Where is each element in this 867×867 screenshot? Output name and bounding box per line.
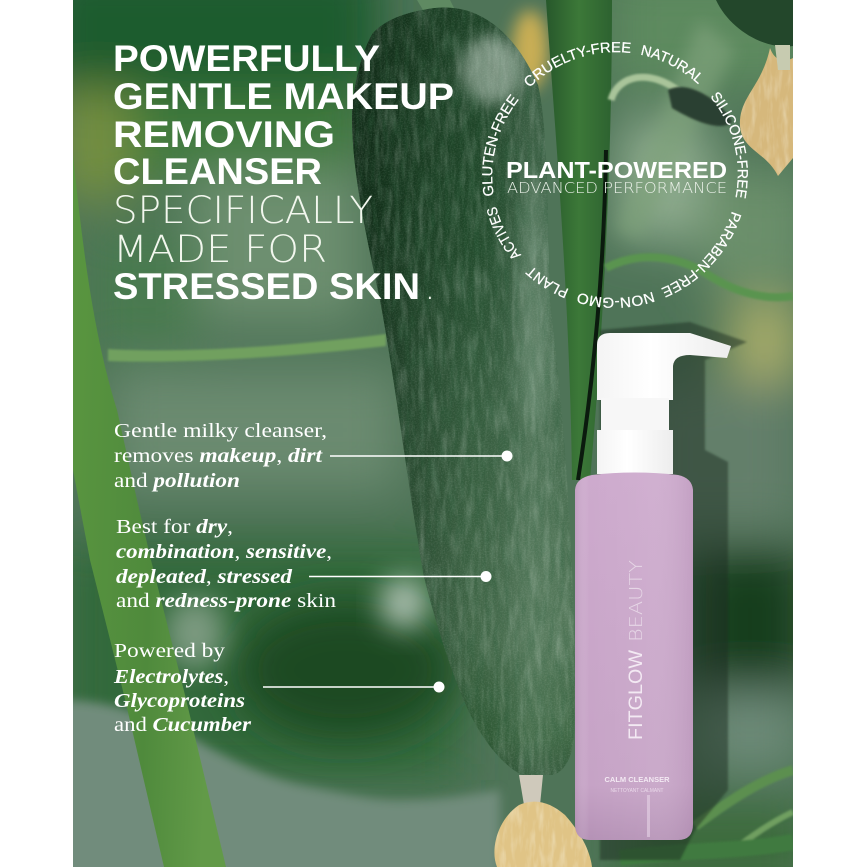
headline	[113, 38, 454, 308]
brand name light: BEAUTY	[626, 560, 647, 642]
central vertical stem	[546, 0, 612, 480]
bottle highlight	[647, 795, 650, 837]
brand name: FITGLOW	[626, 650, 647, 740]
circular claims badge: ACTIVES	[487, 207, 522, 258]
callout: ingredients: Electrolytes ,	[113, 666, 229, 688]
dark bud	[668, 87, 732, 126]
bottle body	[575, 472, 693, 840]
headline: CLEANSER	[113, 151, 322, 192]
headline: GENTLE MAKEUP	[113, 76, 454, 117]
headline: STRESSED SKIN	[113, 266, 420, 307]
bottle shadow	[600, 322, 747, 860]
callout: ingredients: Glycoproteins	[114, 690, 245, 712]
cucumber highlights	[460, 36, 553, 430]
cucumber texture	[352, 8, 575, 775]
callout: gentle cleanser	[114, 420, 512, 492]
light shoots	[615, 20, 735, 240]
callout: skin types	[116, 516, 492, 612]
callout: skin types: Best for dry,	[116, 516, 233, 538]
product name: CALM CLEANSER	[604, 775, 670, 784]
pale blur spots	[165, 577, 428, 669]
badge centre text	[506, 157, 727, 197]
headline: SPECIFICALLY	[113, 189, 373, 232]
dark foliage patch	[235, 600, 455, 740]
circular claims badge: CRUELTY-FREE	[524, 42, 631, 86]
top right flower	[740, 45, 793, 176]
product name french: NETTOYANT CALMANT	[610, 788, 664, 794]
circular claims badge	[482, 42, 748, 308]
cucumber	[352, 8, 575, 775]
callout: ingredients: Powered by	[114, 640, 225, 662]
callout: skin types: combination , sensitive ,	[116, 541, 332, 563]
badge centre text: PLANT-POWERED	[506, 157, 727, 183]
lower tendril	[606, 257, 793, 297]
cucumber stalk and bottom flower	[494, 775, 592, 867]
headline: REMOVING	[113, 114, 335, 155]
top right cucumber	[716, 0, 793, 47]
callout: ingredients	[113, 640, 444, 736]
callout: gentle cleanser: Gentle milky cleanser,	[114, 420, 327, 442]
cucumber stem top	[417, 0, 455, 10]
bottom right stems	[620, 770, 793, 858]
pump	[597, 333, 731, 474]
circular claims badge: NON-GMO	[578, 292, 654, 308]
circular claims badge: GLUTEN-FREE	[482, 94, 519, 196]
callout: skin types: depleated , stressed	[116, 566, 293, 588]
circular claims badge: NATURAL	[641, 45, 701, 84]
circular claims badge: PARABEN-FREE	[661, 212, 742, 298]
left leaf stem	[73, 155, 226, 867]
callout: skin types: and redness-prone skin	[116, 590, 336, 612]
dark stem shadow	[578, 150, 606, 480]
callout: gentle cleanser: removes makeup , dirt	[114, 445, 324, 467]
callout: ingredients: and Cucumber	[114, 714, 251, 736]
lower left leaf	[60, 700, 500, 867]
callout: gentle cleanser: and pollution	[114, 470, 240, 492]
headline: .	[424, 265, 436, 308]
badge centre text: ADVANCED PERFORMANCE	[507, 179, 727, 197]
curling tendril	[611, 77, 680, 100]
circular claims badge: SILICONE-FREE	[711, 92, 748, 198]
blurred petal glow	[512, 10, 548, 90]
product bottle	[575, 333, 731, 840]
horizontal stem	[108, 334, 386, 362]
headline: MADE FOR	[113, 228, 327, 271]
headline: POWERFULLY	[113, 38, 380, 79]
circular claims badge: PLANT	[525, 268, 568, 298]
